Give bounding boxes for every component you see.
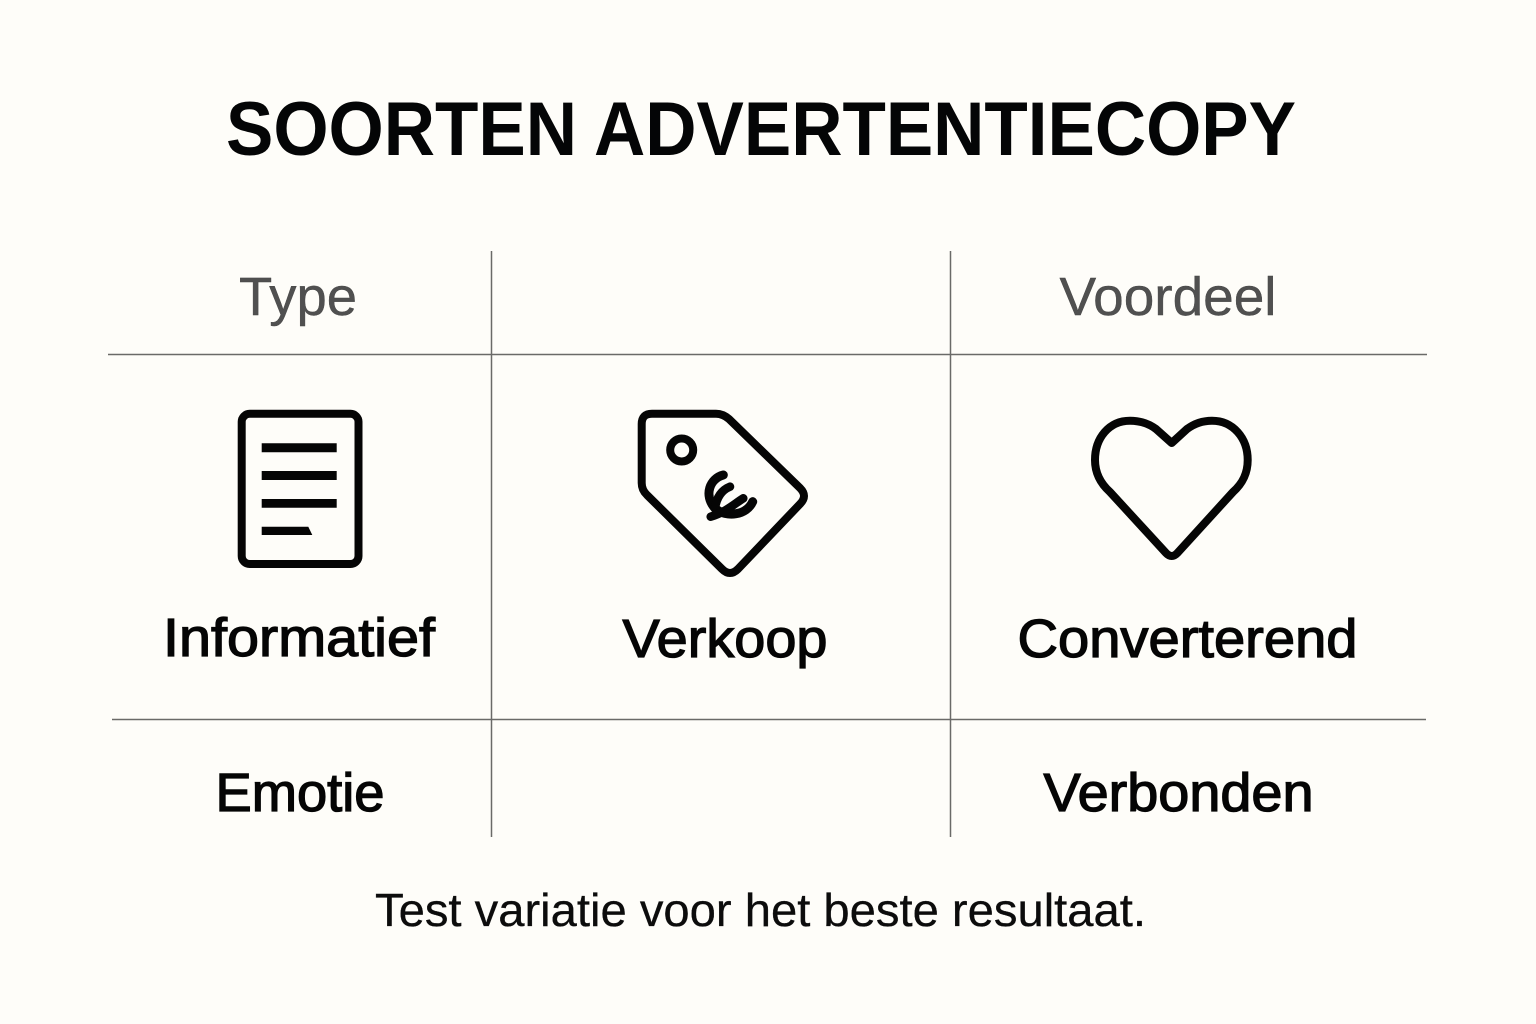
label: Verbonden: Verbonden [1044, 763, 1314, 823]
label: Emotie: Emotie [216, 763, 384, 823]
column header: Voordeel: Voordeel [1060, 267, 1276, 327]
icon: euro price tag [642, 414, 804, 573]
label: Informatief: Informatief [163, 608, 436, 668]
title: SOORTEN ADVERTENTIECOPY [226, 87, 1296, 172]
column header: Type: Type [239, 267, 357, 327]
icon: document [242, 414, 358, 564]
icon: heart [1095, 421, 1248, 556]
table grid [108, 251, 1427, 837]
footer note: Test variatie voor het beste resultaat. [375, 884, 1146, 936]
label: Converterend: Converterend [1018, 609, 1358, 669]
label: Verkoop: Verkoop [622, 609, 828, 669]
